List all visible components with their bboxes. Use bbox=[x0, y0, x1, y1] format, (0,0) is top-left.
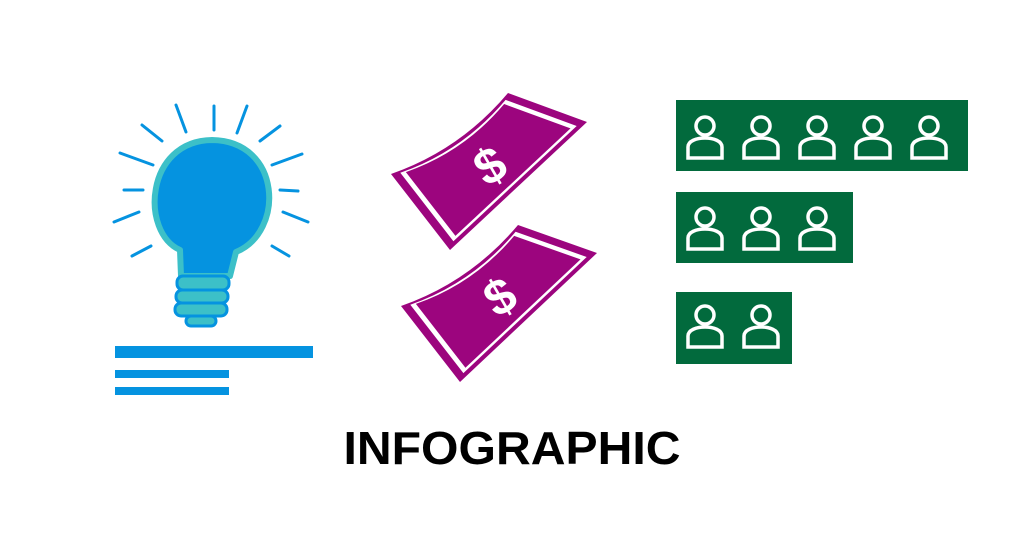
people row 2 bbox=[676, 192, 853, 263]
people row 3 bbox=[676, 292, 792, 364]
icon: light bulb bbox=[114, 105, 308, 326]
icon: bill 2: $ bbox=[474, 266, 526, 328]
bulb rays bbox=[114, 105, 308, 256]
icon: bill 1: $ bbox=[464, 135, 516, 197]
title: INFOGRAPHIC bbox=[344, 422, 680, 474]
text lines placeholder bbox=[115, 346, 313, 395]
people row 1 bbox=[676, 100, 968, 171]
icon: bill 1 bbox=[391, 93, 587, 250]
bulb glass bbox=[155, 140, 269, 276]
bulb screw base bbox=[175, 276, 229, 326]
icon: bill 2 bbox=[401, 225, 597, 382]
